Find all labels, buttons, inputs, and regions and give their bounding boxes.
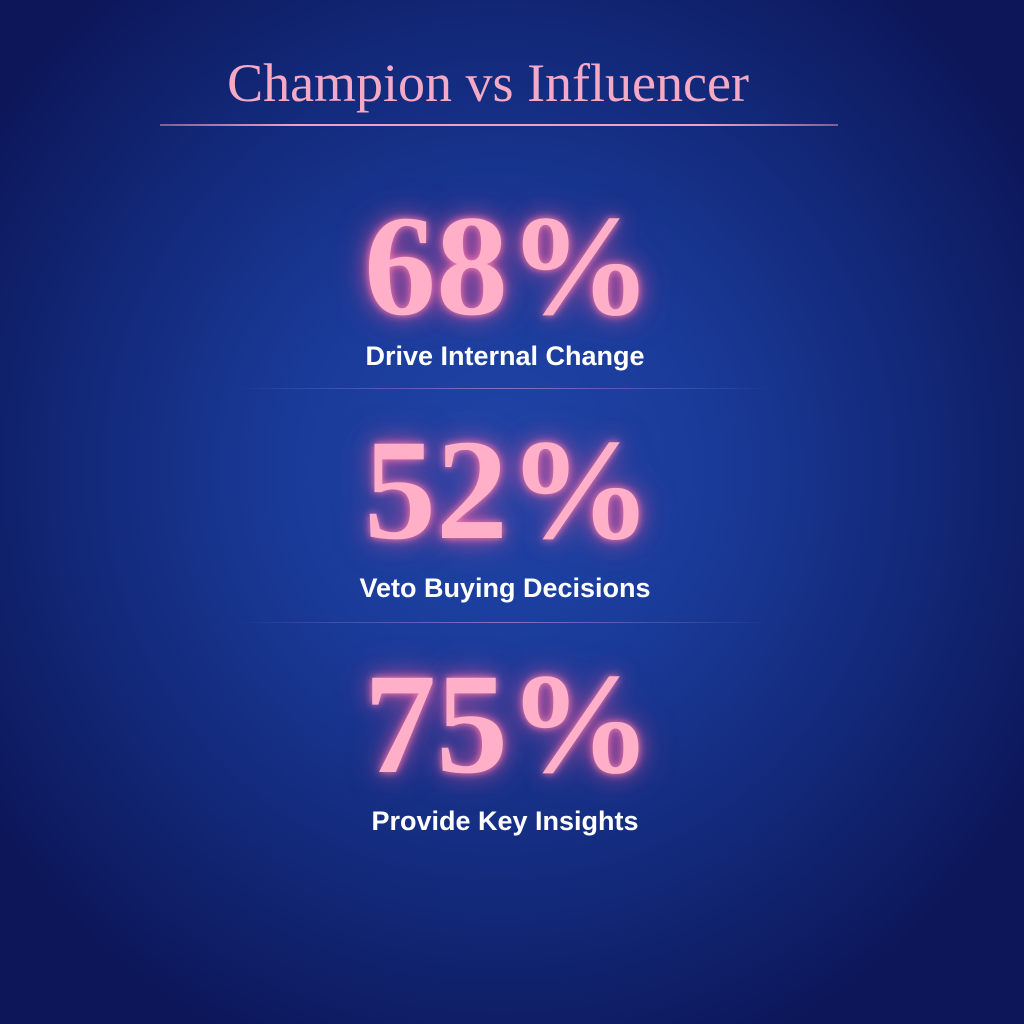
stat: 52%: 52%: [364, 411, 652, 570]
label: drive internal change: Drive Internal Change: [365, 341, 645, 371]
label: veto buying decisions: Veto Buying Decisions: [359, 573, 651, 603]
label: provide key insights: Provide Key Insights: [371, 806, 639, 836]
stat: 68%: 68%: [364, 187, 652, 346]
stat: 75%: 75%: [364, 645, 652, 804]
title: Champion vs Influencer: [227, 53, 749, 113]
